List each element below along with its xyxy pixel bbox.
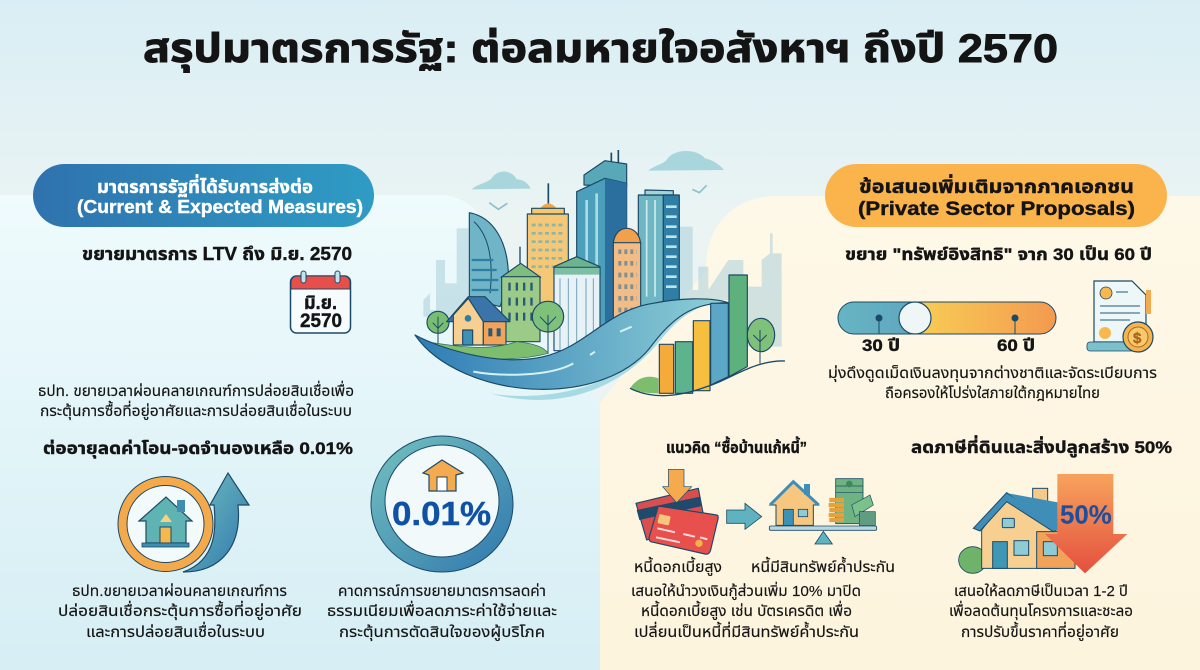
icon: 0.01 percent ring: 0.01% — [392, 495, 491, 532]
text: tax reduction — [949, 583, 1133, 641]
leasehold description — [828, 364, 1157, 402]
panel: current measures — [33, 164, 557, 641]
birds — [489, 185, 707, 209]
house — [447, 297, 510, 345]
heading pill: private sector: (Private Sector Proposals) — [858, 199, 1135, 220]
river swoosh — [415, 299, 728, 389]
leasehold heading: ขยาย "ทรัพย์อิงสิทธิ" จาก 30 เป็น 60 ปี — [845, 245, 1152, 264]
chart: 30 to 60 year bar: 30 ปี — [862, 336, 900, 355]
curved tower — [469, 213, 508, 307]
heading pill: current measures — [33, 164, 374, 227]
right tower — [638, 195, 663, 307]
icon: contract with coin — [1087, 281, 1153, 352]
icon: 0.01 percent ring — [371, 436, 513, 572]
peach tower — [613, 228, 641, 243]
icon: credit cards and debt swap — [636, 469, 877, 554]
light wash under river — [490, 303, 713, 400]
heading pill: private sector: ข้อเสนอเพิ่มเติมจากภาคเอกชน — [859, 174, 1134, 198]
transfer fee heading: ต่ออายุลดค่าโอน-จดจำนองเหลือ 0.01% — [43, 438, 353, 459]
chart: 30 to 60 year bar: 60 ปี — [997, 336, 1035, 355]
title: สรุปมาตรการรัฐ: ต่อลมหายใจอสังหาฯ ถึงปี 2570 — [143, 26, 1058, 73]
heading pill: private sector — [825, 164, 1167, 227]
text: bank of thailand extension: ปล่อยสินเชื่อกระตุ้นการซื้อที่อยู่อาศัย — [58, 600, 302, 620]
LTV description: กระตุ้นการซื้อที่อยู่อาศัยและการปล่อยสินเชื่อในระบบ — [40, 400, 352, 420]
text: bank of thailand extension — [58, 582, 302, 641]
icon: house with 50 percent down arrow: 50% — [1060, 499, 1112, 529]
panel: private sector proposals — [631, 164, 1172, 641]
LTV description: ธปท. ขยายเวลาผ่อนคลายเกณฑ์การปล่อยสินเชื่อเพื่อ — [38, 380, 354, 400]
leasehold description: ถือครองให้โปร่งใสภายใต้กฎหมายไทย — [885, 384, 1100, 402]
credit cards — [636, 469, 718, 554]
label: high interest debt: หนี้ดอกเบี้ยสูง — [634, 556, 722, 576]
leasehold description: มุ่งดึงดูดเม็ดเงินลงทุนจากต่างชาติและจัดระเบียบการ — [828, 364, 1157, 382]
clouds — [472, 172, 531, 189]
green ground — [427, 342, 548, 359]
text: tax reduction: การปรับขึ้นราคาที่อยู่อาศัย — [961, 621, 1119, 641]
heading pill: current measures: (Current & Expected Measures) — [77, 197, 363, 217]
text: debt refinance: หนี้ดอกเบี้ยสูง เช่น บัตรเครดิต เพื่อ — [641, 600, 852, 620]
white building — [554, 257, 600, 275]
text: bank of thailand extension: ธปท.ขยายเวลาผ่อนคลายเกณฑ์การ — [72, 582, 287, 600]
tall blue tower — [611, 150, 618, 163]
scale with house and money — [769, 479, 877, 544]
chart: 30 to 60 year bar — [838, 302, 1056, 355]
text: debt refinance — [631, 581, 861, 641]
LTV heading: ขยายมาตรการ LTV ถึง มิ.ย. 2570 — [82, 244, 352, 264]
text: tax reduction: เสนอให้ลดภาษีเป็นเวลา 1-2 ปี — [954, 583, 1128, 600]
label: secured debt: หนี้มีสินทรัพย์ค้ำประกัน — [751, 556, 895, 576]
text: debt refinance: เปลี่ยนเป็นหนี้ที่มีสินทรัพย์ค้ำประกัน — [634, 621, 859, 641]
icon: calendar: 2570 — [300, 311, 342, 332]
icon: contract with coin: $ — [1133, 330, 1142, 347]
trees — [427, 301, 775, 363]
orange tower — [546, 183, 551, 208]
text: debt refinance: เสนอให้นำวงเงินกู้ส่วนเพิ่ม 10% มาปิด — [631, 581, 861, 600]
text: bank of thailand extension: และการปล่อยสินเชื่อในระบบ — [86, 621, 265, 641]
text: fee reduction forecast: กระตุ้นการตัดสินใจของผู้บริโภค — [339, 624, 545, 641]
green building — [518, 247, 522, 263]
text: fee reduction forecast: ธรรมเนียมเพื่อลดภาระค่าใช้จ่ายและ — [327, 600, 557, 620]
icon: calendar: มิ.ย. — [304, 293, 337, 314]
text: fee reduction forecast: คาดการณ์การขยายมาตรการลดค่า — [338, 582, 546, 600]
text: fee reduction forecast — [327, 582, 557, 641]
illustration: city skyline and river — [415, 150, 785, 400]
icon: house in ring with up arrow — [118, 473, 249, 572]
arrow — [727, 503, 762, 529]
land tax heading: ลดภาษีที่ดินและสิ่งปลูกสร้าง 50% — [911, 435, 1172, 458]
debt concept heading: แนวคิด “ซื้อบ้านแก้หนี้” — [666, 436, 807, 457]
icon: calendar — [290, 271, 350, 333]
icon: house with 50 percent down arrow — [959, 474, 1127, 573]
LTV description — [38, 380, 354, 420]
bar chart — [630, 275, 785, 396]
heading pill: current measures: มาตรการรัฐที่ได้รับการส่งต่อ — [97, 174, 313, 197]
background skyline — [423, 227, 782, 347]
text: tax reduction: เพื่อลดต้นทุนโครงการและชะลอ — [949, 600, 1133, 620]
